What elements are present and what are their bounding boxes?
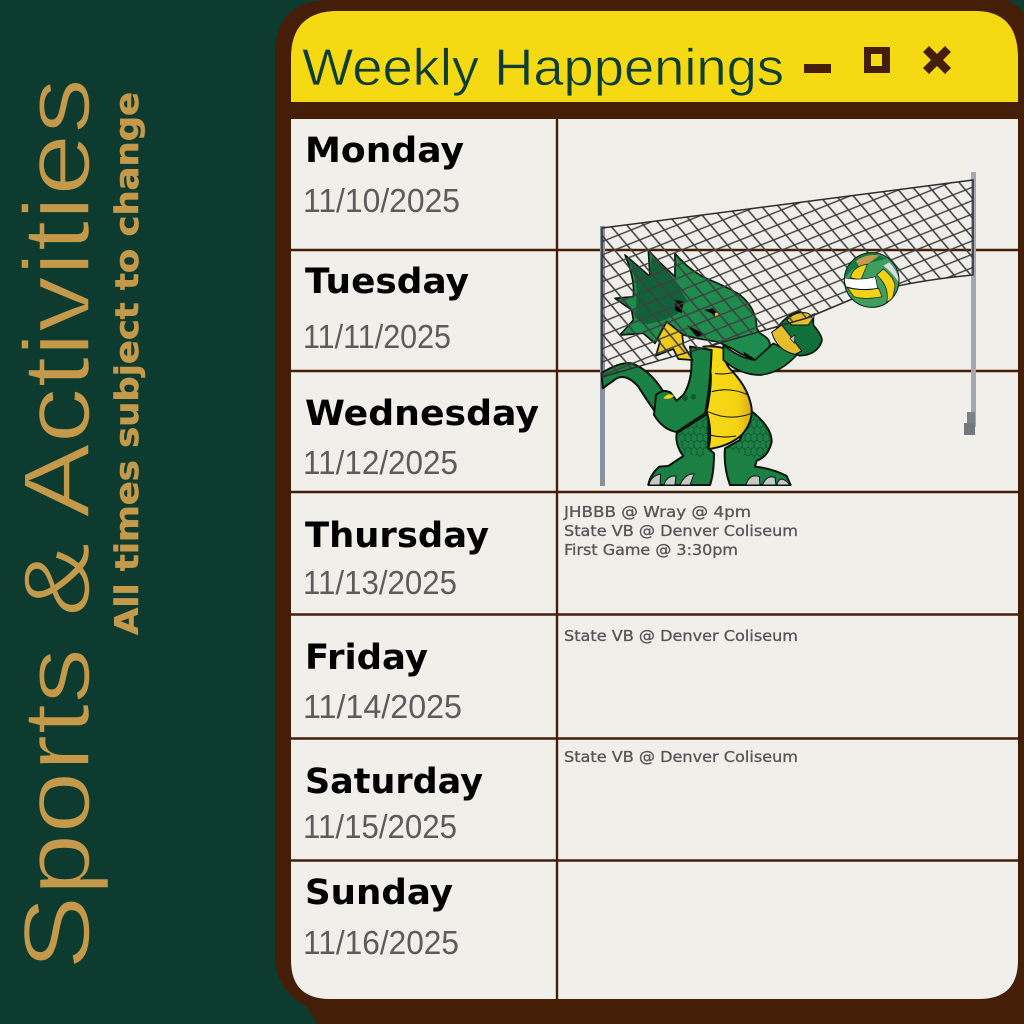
Sunday row: [303, 873, 459, 962]
claw: [790, 313, 815, 343]
dragon tail: [602, 363, 663, 412]
yellow wing: [645, 319, 693, 360]
table background: [291, 119, 1018, 999]
schedule table: [291, 119, 1018, 999]
raised arm: [723, 343, 797, 375]
Thursday row: 11/13/2025: [303, 565, 457, 602]
dragon head and wing: [615, 250, 822, 375]
Monday row: [303, 131, 464, 220]
Saturday events: State VB @ Denver Coliseum: [564, 748, 798, 766]
window frame: [275, 0, 1024, 1024]
Monday row: Monday: [305, 131, 464, 171]
title bar: [291, 11, 1018, 102]
Sunday row: Sunday: [305, 873, 453, 913]
Wednesday row: [303, 394, 539, 482]
side subtitle: schedule note: All times subject to change: [108, 92, 146, 635]
head black shadow: [675, 300, 757, 362]
icon: maximize: [864, 47, 890, 73]
dragon arm: [654, 347, 712, 432]
Sunday row: 11/16/2025: [303, 925, 459, 962]
Friday events: State VB @ Denver Coliseum: [564, 627, 798, 645]
dragon fingers: [772, 312, 813, 354]
ball yellow panel right: [877, 269, 895, 302]
ball dark top: [843, 252, 887, 277]
arm spots: [682, 394, 696, 401]
dragon toes: [649, 474, 790, 485]
Wednesday row: Wednesday: [305, 394, 539, 434]
Monday row: 11/10/2025: [303, 183, 460, 220]
net mesh: [602, 180, 973, 377]
Tuesday row: [303, 262, 469, 356]
ball base: [844, 252, 900, 308]
Wednesday row: 11/12/2025: [303, 445, 458, 482]
Thursday events: [563, 503, 798, 559]
Friday row: 11/14/2025: [303, 689, 462, 726]
Thursday events: State VB @ Denver Coliseum: [564, 522, 798, 540]
dragon belly segments: [708, 373, 752, 437]
dragon belly: [703, 346, 752, 449]
Friday row: Friday: [305, 638, 428, 678]
dragon eye: [704, 308, 720, 318]
arm yellow scale: [663, 394, 674, 399]
dragon left leg: [648, 413, 714, 485]
dragon fist: [773, 312, 822, 356]
Saturday row: 11/15/2025: [303, 809, 457, 846]
Tuesday row: 11/11/2025: [303, 319, 451, 356]
dark crest shading: [628, 257, 687, 325]
Tuesday row: Tuesday: [305, 262, 469, 302]
side title: sports and activities: Sports & Activities: [4, 78, 109, 970]
illustration: dragon mascot with volleyball net: [600, 172, 976, 486]
ball grey panel: [883, 262, 898, 282]
row and column grid: [291, 119, 1018, 999]
Saturday row: [303, 762, 483, 846]
Thursday row: [303, 516, 489, 602]
Thursday events: JHBBB @ Wray @ 4pm: [563, 503, 751, 521]
icon: minimize: [804, 64, 831, 73]
Friday row: [303, 638, 462, 726]
head: [615, 250, 770, 360]
ball outline: [844, 253, 899, 307]
icon: close: [923, 46, 951, 74]
ball yellow band: [847, 288, 882, 298]
ball yellow panel left: [851, 264, 867, 280]
window title: Weekly Happenings: [302, 39, 784, 97]
Thursday row: Thursday: [305, 516, 489, 556]
dragon body: [602, 346, 791, 485]
volleyball: [843, 252, 900, 308]
net poles: [600, 172, 976, 486]
dragon right leg: [725, 410, 791, 485]
Thursday events: First Game @ 3:30pm: [564, 541, 738, 559]
leg scales: [678, 412, 771, 459]
dragon iris: [715, 313, 719, 317]
ball tan panel: [856, 255, 880, 266]
Saturday row: Saturday: [305, 762, 483, 802]
ball white band: [843, 277, 878, 289]
